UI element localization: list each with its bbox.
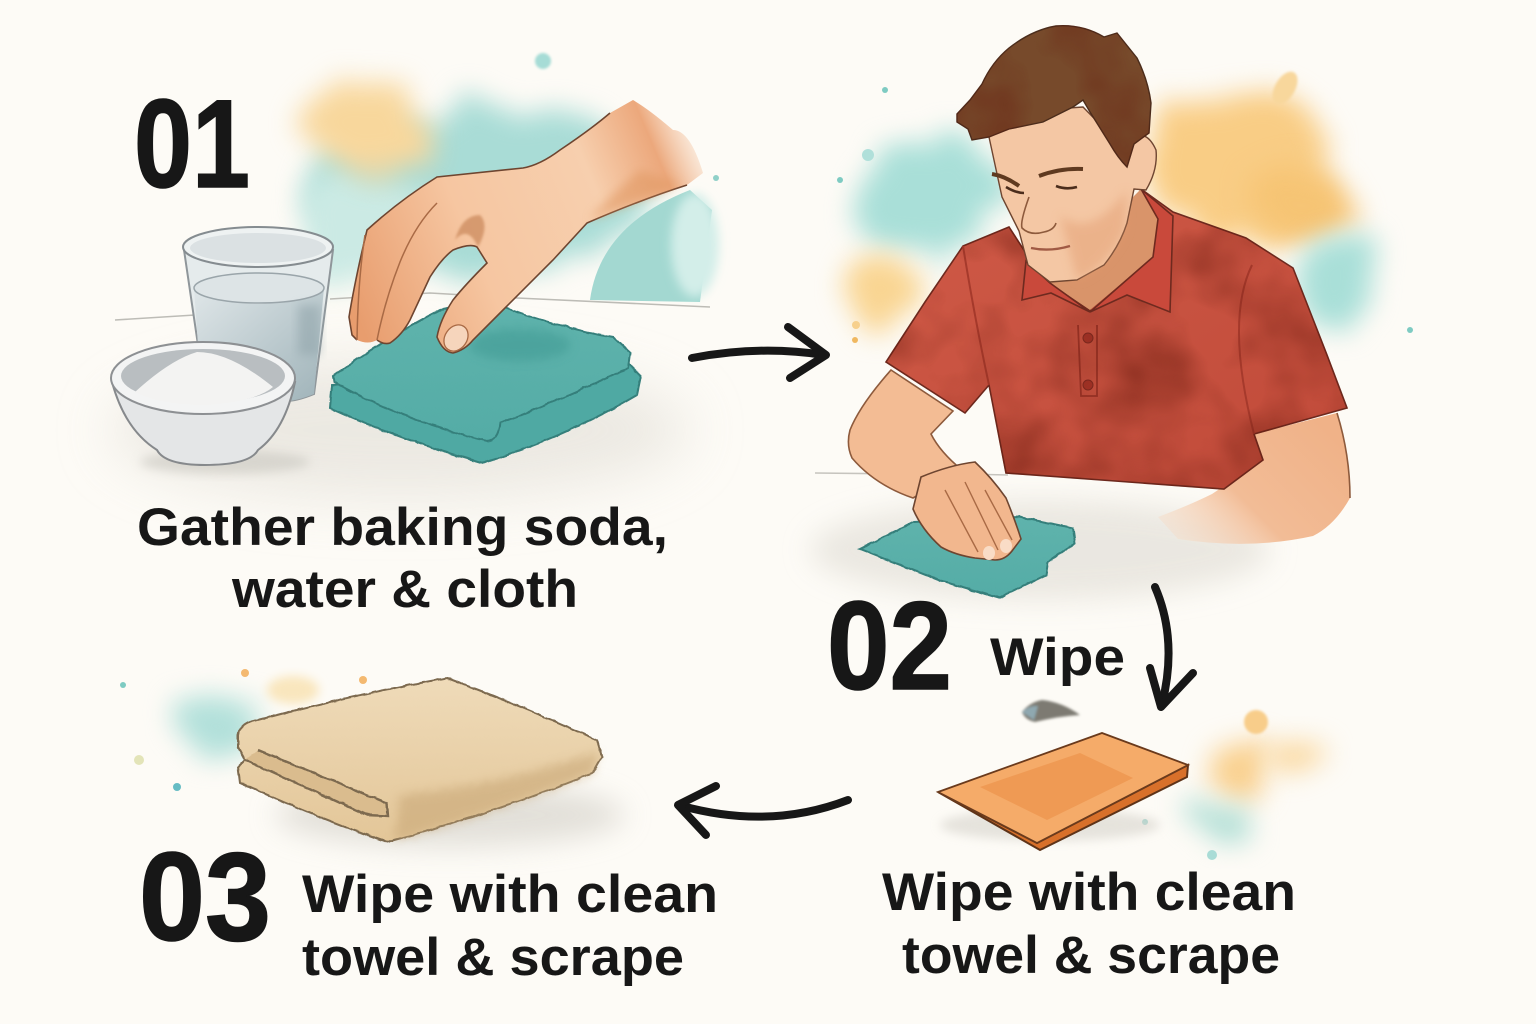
step 2 number: 02	[827, 577, 952, 716]
table surface	[810, 473, 1270, 600]
arrow: step 2 down to scrape	[1150, 587, 1193, 707]
arrow: scrape back to step 3	[678, 786, 848, 835]
icon: folded beige towel	[238, 678, 625, 847]
icon: teal cloth under hand	[860, 517, 1075, 598]
step 1 caption	[137, 498, 668, 619]
far arm	[1158, 413, 1350, 544]
arrow: step 1 to step 2	[692, 327, 826, 378]
icon: orange pad	[938, 733, 1188, 850]
icon: reaching hand	[349, 100, 703, 356]
face	[989, 107, 1156, 282]
step 3 caption: Wipe with clean	[302, 865, 718, 924]
icon: water glass	[183, 227, 333, 401]
step 1 caption: Gather baking soda,	[137, 498, 668, 557]
red polo shirt	[886, 189, 1347, 489]
near arm	[848, 370, 962, 498]
step 1 caption: water & cloth	[231, 560, 578, 619]
step 2 caption: towel & scrape	[902, 926, 1280, 985]
step 3 number: 03	[139, 828, 271, 967]
icon: residue smudge	[1022, 700, 1080, 722]
icon: bowl of baking soda	[111, 342, 310, 474]
step 2 label: Wipe	[990, 628, 1125, 687]
watercolour wash: step 1	[295, 53, 719, 302]
step 1 number: 01	[134, 75, 250, 214]
hand on cloth	[913, 462, 1021, 560]
watercolour wash: step 2	[837, 67, 1413, 343]
table surface	[110, 293, 710, 500]
step 3 caption: towel & scrape	[302, 928, 684, 987]
step 2 caption	[882, 863, 1296, 985]
hair	[957, 26, 1151, 167]
step 1 illustration: supplies	[110, 100, 710, 500]
step 2 caption: Wipe with clean	[882, 863, 1296, 922]
step 2 illustration: person wiping	[810, 26, 1350, 600]
shirt collar	[1022, 189, 1173, 312]
neck	[1050, 189, 1158, 310]
watercolour wash: orange pad	[1142, 710, 1324, 860]
step 3 caption	[302, 865, 718, 987]
icon: folded teal cloth	[330, 305, 641, 463]
watercolour wash: step 3	[120, 669, 367, 791]
